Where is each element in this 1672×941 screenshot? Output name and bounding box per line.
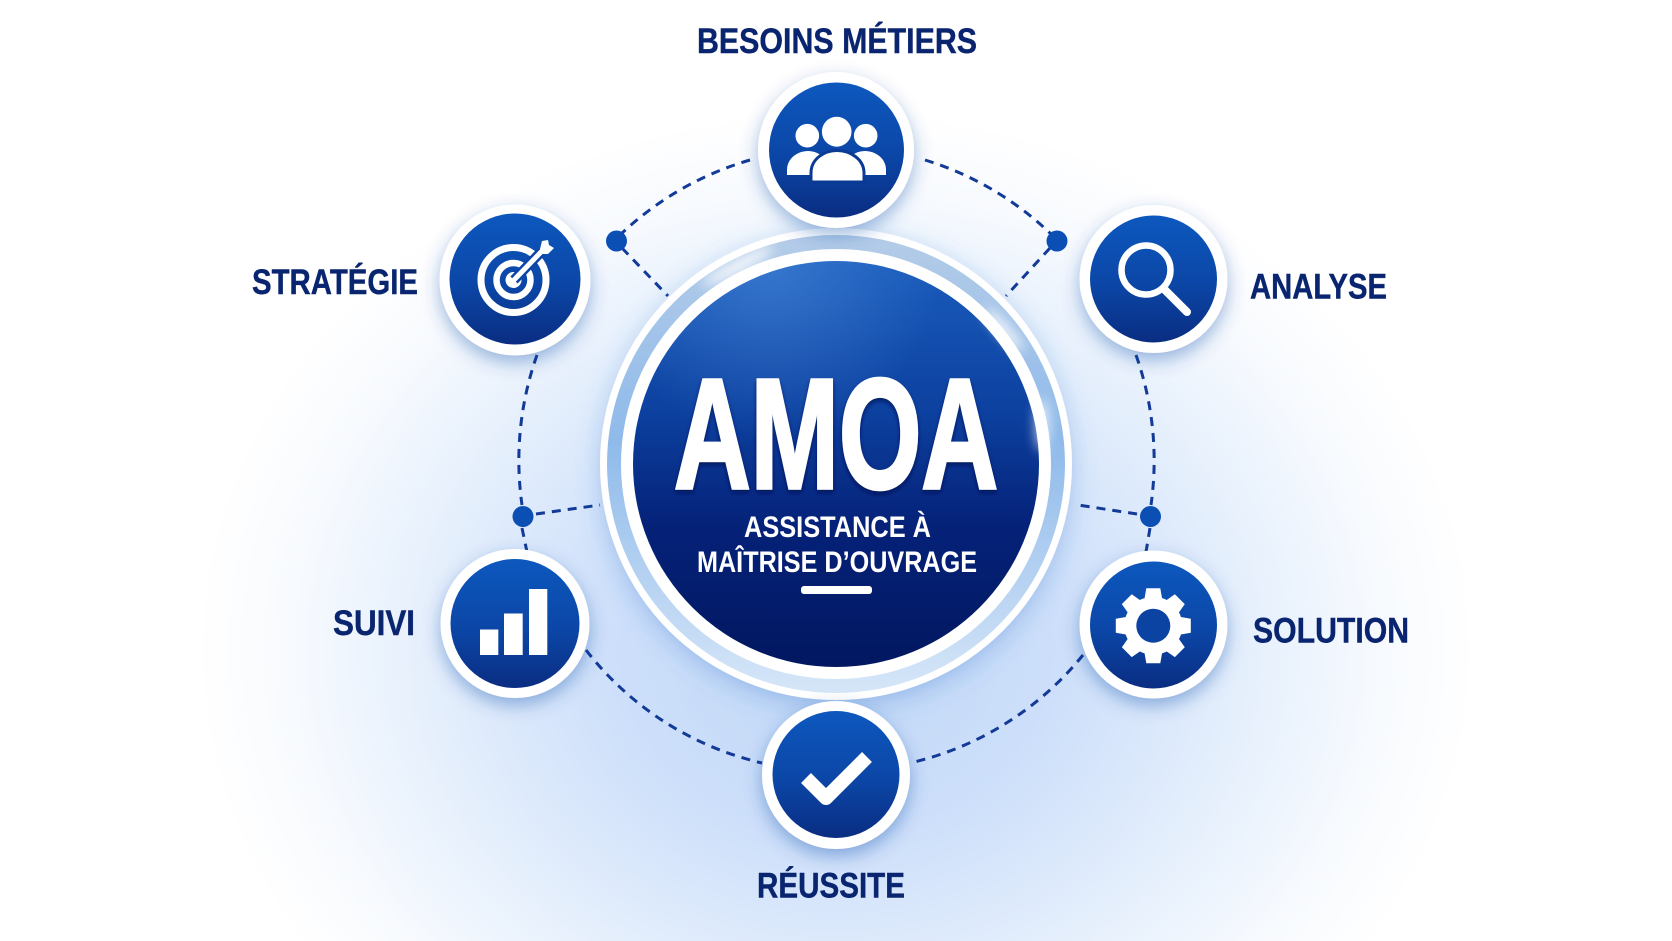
node: besoins métiers xyxy=(758,72,914,228)
central AMOA badge xyxy=(600,228,1072,700)
subtitle line 1: ASSISTANCE À xyxy=(744,510,931,544)
node: solution xyxy=(1080,550,1228,698)
icon: gear xyxy=(1116,588,1191,663)
icon: magnifying glass xyxy=(1122,246,1187,312)
icon: bar chart xyxy=(480,589,547,655)
label: solution: SOLUTION xyxy=(1253,612,1409,650)
subtitle line 2: MAÎTRISE D’OUVRAGE xyxy=(697,545,977,579)
node: réussite xyxy=(762,701,910,849)
node: stratégie xyxy=(440,204,590,356)
dashed connector network xyxy=(519,160,1154,763)
connector dots xyxy=(512,230,1161,527)
icon: group of people xyxy=(787,117,886,182)
node: analyse xyxy=(1080,205,1228,353)
AMOA title: AMOA xyxy=(674,347,998,522)
label: réussite: RÉUSSITE xyxy=(757,866,905,906)
icon: target with arrow xyxy=(481,240,554,312)
label: analyse: ANALYSE xyxy=(1250,268,1387,306)
label: suivi: SUIVI xyxy=(333,604,415,643)
label: besoins métiers: BESOINS MÉTIERS xyxy=(697,21,977,61)
node: suivi xyxy=(440,549,590,698)
label: stratégie: STRATÉGIE xyxy=(252,262,418,302)
underline bar xyxy=(801,586,872,594)
icon: check mark xyxy=(806,757,867,798)
